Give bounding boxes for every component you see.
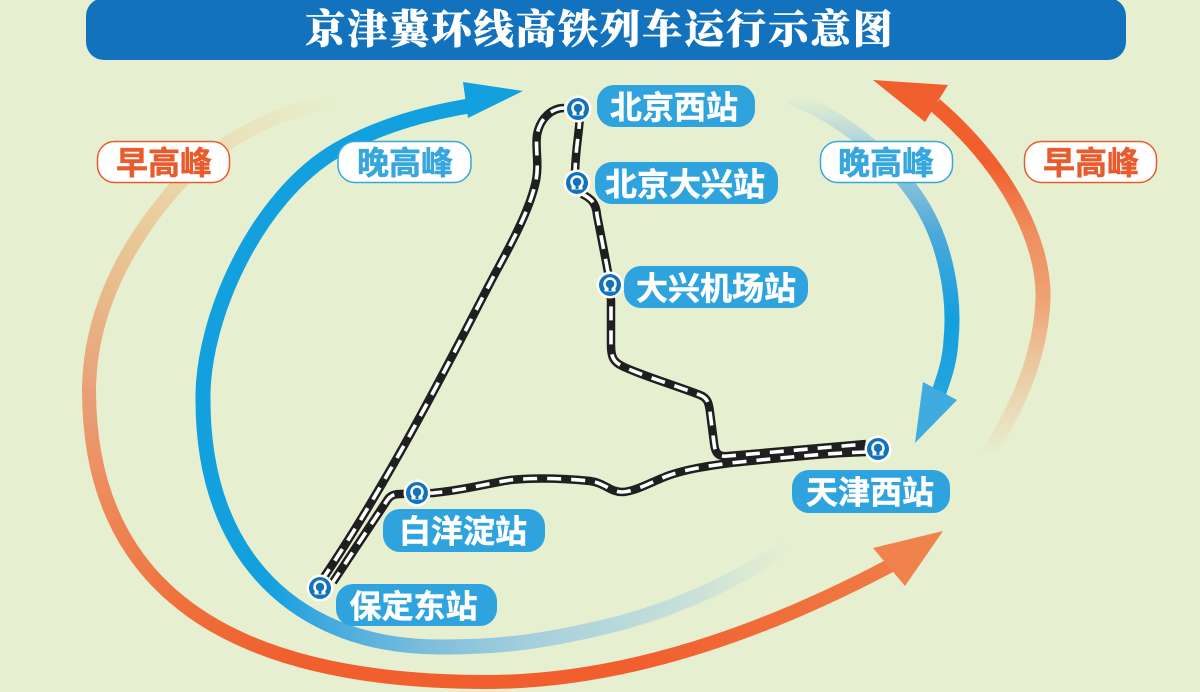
label: Daxing Airport station: 大兴机场站 (636, 270, 796, 306)
icon: station Beijing West (564, 96, 592, 122)
label: evening peak left (338, 142, 471, 182)
label: evening peak right: 晚高峰 (838, 145, 934, 181)
label: Baoding East station (336, 584, 497, 626)
railway: Tianjin West to Baiyangdian to Baoding East (333, 452, 866, 582)
railway: Beijing West to Daxing to Airport to Tianjin West (575, 115, 866, 456)
label: Tianjin West station (792, 470, 950, 513)
label: morning peak left: 早高峰 (116, 145, 212, 181)
label: evening peak right (820, 142, 952, 182)
icon: station Baoding East (306, 574, 334, 602)
icon: station Daxing Airport (596, 272, 624, 298)
label: Baiyangdian station (383, 509, 545, 552)
railway: Beijing West to Baoding East (322, 108, 564, 580)
icon: station Beijing Daxing (564, 170, 590, 196)
label: morning peak right (1024, 142, 1156, 182)
label: Beijing West station (597, 85, 755, 127)
icon: station Tianjin West (864, 436, 892, 462)
title: 京津冀环线高铁列车运行示意图 (305, 7, 895, 52)
label: Beijing West station: 北京西站 (610, 90, 738, 126)
label: Baoding East station: 保定东站 (349, 588, 478, 624)
label: Tianjin West station: 天津西站 (806, 474, 934, 510)
label: Baiyangdian station: 白洋淀站 (399, 514, 527, 550)
label: morning peak left (98, 142, 230, 182)
label: evening peak left: 晚高峰 (357, 145, 453, 181)
arrow: evening peak left loop (203, 82, 790, 647)
arrow: morning peak left loop (89, 100, 943, 682)
icon: station Baiyangdian (404, 480, 430, 506)
label: morning peak right: 早高峰 (1043, 145, 1139, 181)
label: Beijing Daxing station: 北京大兴站 (605, 166, 765, 202)
arrow: evening peak right loop (790, 97, 957, 443)
title (86, 0, 1126, 60)
arrow: morning peak right loop (873, 80, 1043, 455)
